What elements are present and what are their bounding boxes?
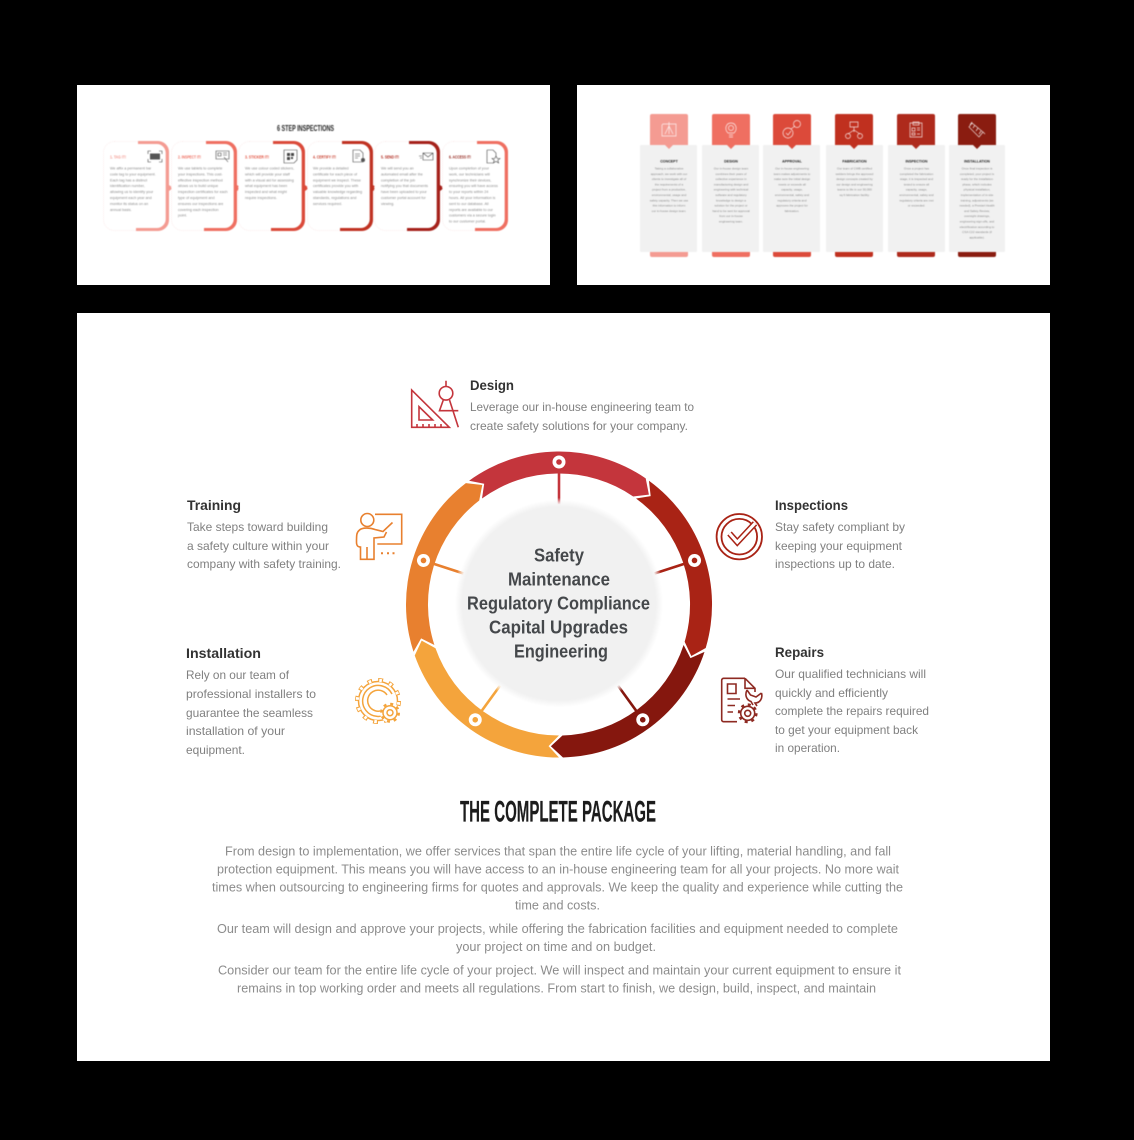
column: concept: project from a productive, [652,188,686,192]
column: approval: APPROVAL [782,160,803,164]
column: installation: CSA C22 standards (if [962,230,992,234]
text block: complete package description: your project on time and on budget. [456,940,656,954]
icon: training [356,514,402,559]
card: access it: reports are available to our [449,208,494,212]
text block: training [187,497,341,571]
card: send it: viewing. [381,202,394,206]
center circle background [455,500,663,708]
column: installation: ready for the installation [961,177,993,181]
card: inspect it: point. [178,214,187,218]
column: design: DESIGN [724,160,738,164]
column: design: solution for the project or [714,204,748,208]
text block: repairs [775,644,929,755]
card: send it [374,141,444,231]
text block: repairs: quickly and efficiently [775,686,888,700]
column: fabrication: FABRICATION [842,160,867,164]
column: installation: completed, your project is [960,172,995,176]
text block: training: a safety culture within your [187,539,329,553]
center text: Capital Upgrades [489,618,628,638]
center text: Maintenance [508,570,610,590]
card: inspect it: effective inspection method [178,178,223,182]
card: access it: synchronize their devices, [449,178,491,182]
card: send it: have been uploaded to your [381,190,427,194]
column: concept: approach, we work with our [651,172,687,176]
text block: complete package description: Consider our team for the entire life cycle of your project. We will inspect and maintain your current equipment to ensure it [218,964,902,978]
card: access it: work, our technicians will [449,172,490,176]
center text: Engineering [514,642,608,662]
center text: Regulatory Compliance [467,594,650,614]
column: inspection: tested to ensure all [904,182,930,186]
text block: complete package description [212,844,903,996]
heading: the complete package: THE COMPLETE PACKAGE [460,796,656,828]
text block: inspections [775,497,905,571]
card: sticker it: what equipment has been [245,184,287,188]
panel: 6 step inspections [77,85,550,285]
column: design: engineering team. [719,220,743,224]
card: sticker it: with a visual aid for assessing [245,178,294,182]
column: design: from our in-house [719,214,743,218]
column: concept: this information to inform [653,204,686,208]
column: design: manufacturing design and [714,182,749,186]
column: inspection: environmental, safety and [899,193,934,197]
ring segment: installation [396,633,573,781]
column: approval: make sure the initial design [774,177,811,181]
ring segment: inspections [626,472,732,659]
column: approval: capacity, usage, [781,188,803,192]
text block: complete package description: From design to implementation, we offer services that span the entire life cycle of your lifting, material handling, and fall [225,844,891,858]
card: certify it: valuable knowledge regarding [313,190,362,194]
column: design: knowledge to design a [716,198,746,202]
ring segment: repairs [545,633,722,781]
column: design: hand to be sent for approval [712,209,750,213]
center text [467,546,650,662]
column: inspection: capacity, usage, [906,188,927,192]
text block: training: company with safety training. [187,557,341,571]
column: installation: training, adjustments (as [961,198,994,202]
card: sticker it: inspected and what might [245,190,287,194]
card: send it: 5. SEND IT! [381,154,399,160]
column: installation: physical installation, [964,188,991,192]
card: sticker it: 3. STICKER IT! [245,154,269,160]
card: access it: 6. ACCESS IT! [449,154,471,160]
column: concept: our in-house design team. [652,209,687,213]
text block: training: Take steps toward building [187,520,328,534]
card: tag it: 1. TAG IT! [110,154,126,160]
card: send it: notifying you that documents [381,184,428,188]
column: installation: implementation of in-site [961,193,994,197]
column: fabrication: sq ft fabrication facility. [839,193,870,197]
column: fabrication: teams to life in our 30,000 [837,188,872,192]
column: installation: Once final inspection is [962,166,993,170]
card: inspect it [172,141,241,231]
column: concept: CONCEPT [660,160,679,164]
column: inspection [888,114,945,257]
column: design: software and regulatory [715,193,747,197]
column: installation: engineering sign-offs, and [960,220,995,224]
card: tag it: equipment each year and [110,196,152,200]
column: design: Our in-house design team [714,166,749,170]
text block: installation: guarantee the seamless [186,706,313,720]
heading: 6 step inspections: 6 STEP INSPECTIONS [277,123,334,133]
text block: installation: professional installers to [186,687,316,701]
card: inspect it: ensures our inspections are [178,202,223,206]
column: design: collective experience in [715,177,747,181]
card: tag it: identification number, [110,184,145,188]
text block: complete package description: times when outsourcing to engineering firms for quotes and approvals. We keep the quality and experience while cutting the [212,880,903,894]
text block: inspections: inspections up to date. [775,557,895,571]
card: access it: customers via a secure login [449,214,496,218]
column: installation: electrification according to [960,225,995,229]
ring segment: training [386,472,492,659]
card: sticker it [238,141,309,231]
icon: repairs [722,678,762,722]
card: certify it: 4. CERTIFY IT! [313,154,336,160]
text block: complete package description: time and costs. [515,898,600,912]
card: certify it [308,141,377,231]
card: certify it: equipment we inspect. These [313,178,361,182]
text block: inspections: Stay safety compliant by [775,520,905,534]
text block: complete package description: Our team will design and approve your projects, while offering the fabrication facilities and equipment needed to complete [217,922,898,936]
text block: training: Training [187,497,241,513]
column: installation: oversight drawings, [964,214,990,218]
column: inspection: INSPECTION [906,160,928,164]
card: certify it: certificates provide you with [313,184,358,188]
card: tag it [104,141,173,231]
icon: installation [356,680,400,723]
text block: installation: installation of your [186,724,285,738]
column: installation: INSTALLATION [964,160,990,164]
card: send it: automated email after the [381,172,423,176]
card: inspect it: allows us to build unique [178,184,218,188]
column: concept: safety capacity. Then we use [650,198,689,202]
column: inspection: stage, it is inspected and [900,177,933,181]
center text: Safety [534,546,584,566]
card: sticker it: We use colour coded stickers, [245,166,294,170]
column: approval [763,114,820,257]
card: certify it: certificate for each piece of [313,172,358,176]
text block: inspections: keeping your equipment [775,539,903,553]
card: certify it: services required. [313,202,342,206]
column: fabrication: our design and engineering [836,182,873,186]
card: send it: We will send you an [381,166,414,170]
card: access it: sent to our database. All [449,202,489,206]
card: access it: to your reports within 24 [449,190,488,194]
card: tag it: code tag to your equipment. [110,172,156,176]
column: concept: environmental, usage and [652,193,687,197]
card: access it: ensuring you will have access [449,184,498,188]
column: installation: phase, which includes [962,182,992,186]
text block: design [470,377,694,433]
column: approval: regulatory criteria and [777,198,807,202]
icon: inspections [717,514,762,559]
column: inspection: completed the fabrication [900,172,934,176]
column: installation: applicable). [969,235,985,239]
column: fabrication [826,114,883,257]
card: inspect it: your inspections. This cost- [178,172,223,176]
column: design: engineering with technical [714,188,749,192]
panel: project stages [577,85,1050,285]
card: certify it: standards, regulations and [313,196,356,200]
column: design: combines their years of [715,172,747,176]
text block: complete package description: remains in top working order and meets all regulations. From start to finish, we design, build, inspect, and maintain [237,982,876,996]
column: concept: the requirements of a [655,182,684,186]
text block: repairs: Our qualified technicians will [775,667,926,681]
column: approval: Our in-house engineering [775,166,809,170]
panel: life cycle [77,313,1050,1061]
card: access it: to our customer portal. [449,220,486,224]
column: inspection: or exceeded. [908,204,925,208]
card: sticker it: which will provide your staff [245,172,291,176]
column: design [702,114,759,257]
column: installation: and Safety Review, [964,209,990,213]
card: tag it: We affix a permanent bar [110,166,152,170]
card: tag it: monitor its status on an [110,202,148,206]
card: access it [442,141,508,231]
card: inspect it: covering each inspection [178,208,219,212]
column: inspection: Once a project has [904,166,930,170]
card: tag it: allowing us to identify your [110,190,154,194]
card: tag it: annual basis. [110,208,132,212]
text block: installation: equipment. [186,743,245,757]
column: fabrication: welders brings the approved [836,172,874,176]
column: inspection: regulatory criteria are met [899,198,934,202]
text block: inspections: Inspections [775,497,848,513]
text block: complete package description: protection equipment. This means you will have access to an in-house engineering team for all your projects. No more wait [217,862,900,876]
card: send it: customer portal account for [381,196,426,200]
column: concept: Taking a collaborative [655,166,684,170]
ring segment: design [469,451,649,504]
column: approval: approves the project for [776,204,808,208]
column: installation: needed), a Prestart Health [959,204,995,208]
card: sticker it: require inspections. [245,196,277,200]
card: inspect it: type of equipment and [178,196,214,200]
column: concept [640,114,697,257]
text block: design: Leverage our in-house engineering team to [470,400,694,414]
card: access it: hours. All your information is [449,196,495,200]
column: approval: environmental, safety and [775,193,810,197]
text block: repairs: in operation. [775,741,840,755]
text block: repairs: complete the repairs required [775,704,929,718]
text block: repairs: Repairs [775,644,824,660]
text block: design: Design [470,377,514,393]
card: tag it: Each tag has a distinct [110,178,147,182]
card: inspect it: 2. INSPECT IT! [178,154,201,160]
column: approval: fabrication. [785,209,799,213]
text block: installation [186,645,316,757]
text block: installation: Installation [186,645,261,661]
text block: repairs: to get your equipment back [775,723,919,737]
column: installation [949,114,1005,257]
card: send it: completion of the job [381,178,415,182]
column: fabrication: design concepts created by [836,177,873,181]
column: approval: team makes adjustments to [774,172,811,176]
card: certify it: We provide a detailed [313,166,349,170]
text block: installation: Rely on our team of [186,668,290,682]
icon: design [412,381,458,427]
card: access it: Upon completion of your [449,166,490,170]
column: approval: meets or exceeds all [778,182,806,186]
card: inspect it: inspection certificates for each [178,190,228,194]
column: concept: clients to investigate all of [652,177,686,181]
card: inspect it: We use tablets to complete [178,166,222,170]
column: fabrication: Our team of CWB certified [837,166,872,170]
text block: design: create safety solutions for your company. [470,419,688,433]
